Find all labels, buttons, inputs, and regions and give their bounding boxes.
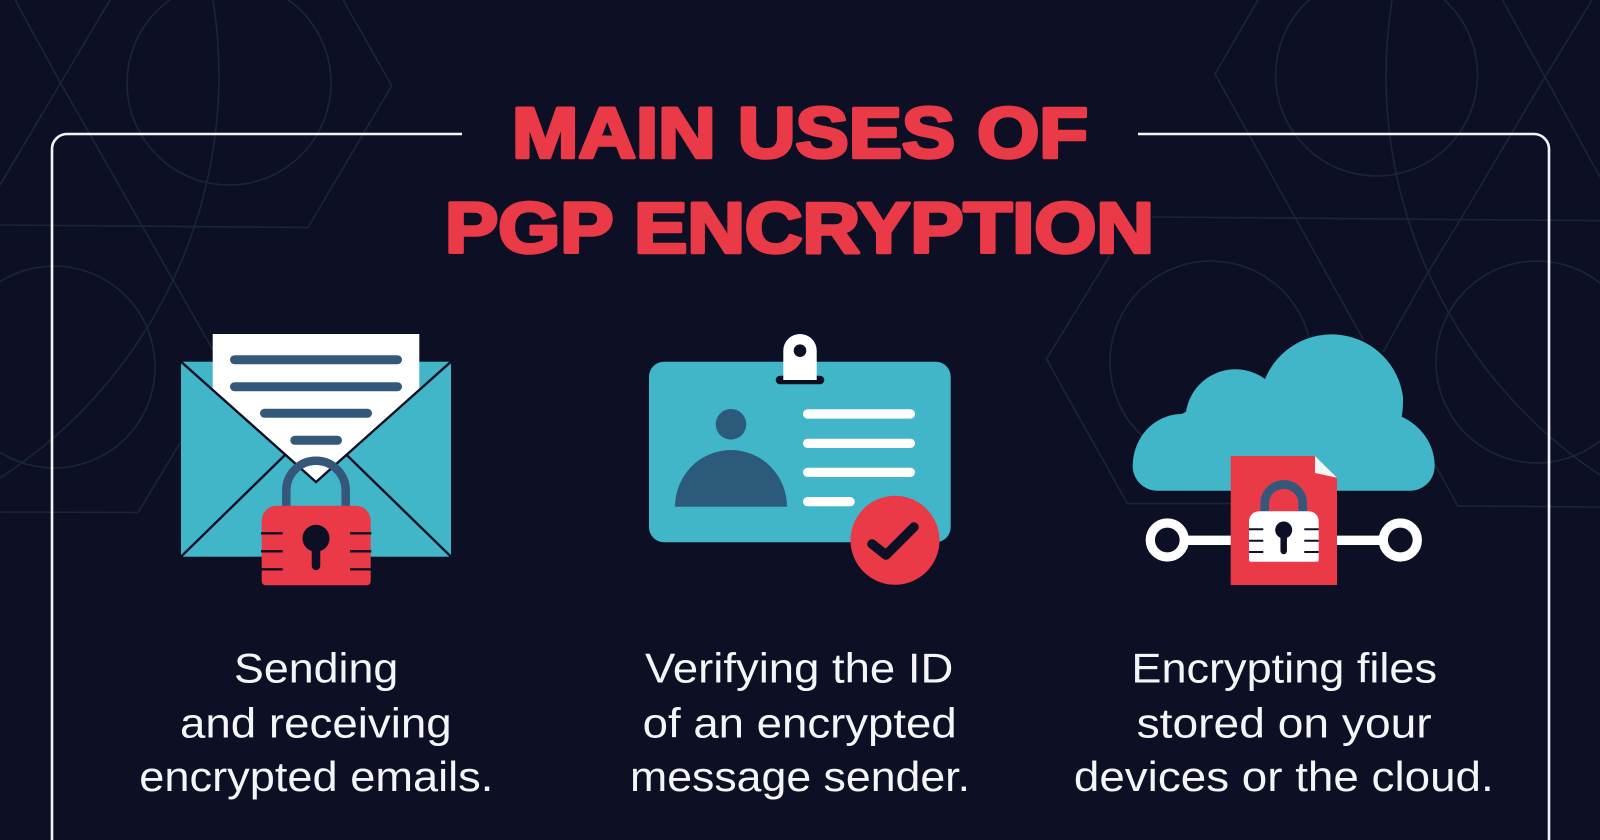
text: sending and receiving: Sending (234, 645, 398, 692)
icon: cloud with locked file (1133, 334, 1435, 585)
text: verifying the id: of an encrypted (643, 699, 957, 746)
text: verifying the id: message sender. (630, 753, 970, 800)
title (445, 94, 1154, 268)
text: sending and receiving: and receiving (180, 699, 452, 746)
icon: envelope with padlock (181, 334, 451, 585)
title: MAIN USES OF (512, 94, 1088, 174)
text: encrypting files (1074, 645, 1494, 800)
text: verifying the id: Verifying the ID (645, 645, 953, 692)
panel frame (52, 134, 1549, 840)
text: sending and receiving: encrypted emails. (139, 753, 493, 800)
title: PGP ENCRYPTION (445, 190, 1154, 268)
text: verifying the id (630, 645, 970, 800)
text: sending and receiving (139, 645, 493, 800)
text: encrypting files: devices or the cloud. (1074, 753, 1494, 800)
icon: ID badge with check (649, 334, 951, 585)
text: encrypting files: stored on your (1137, 699, 1432, 746)
text: encrypting files: Encrypting files (1131, 645, 1437, 692)
